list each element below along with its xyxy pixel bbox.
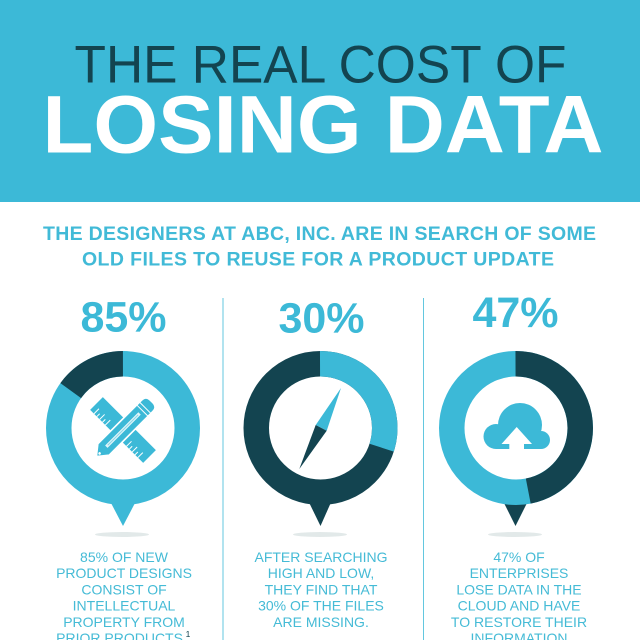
description: TO RESTORE THEIR xyxy=(451,614,587,630)
donut chart: 30% xyxy=(256,364,385,537)
donut chart: 85% xyxy=(33,338,213,537)
description: ENTERPRISES xyxy=(470,565,568,581)
column 1: 85% xyxy=(33,294,213,640)
statistic: 30%: 30% xyxy=(278,294,365,342)
header band xyxy=(0,0,640,202)
title line 2: LOSING DATA xyxy=(42,80,604,170)
subheading xyxy=(43,223,596,270)
description: CONSIST OF xyxy=(81,581,167,597)
description: INTELLECTUAL xyxy=(73,598,176,614)
description xyxy=(56,549,192,640)
description: 1 xyxy=(186,629,191,639)
description: HIGH AND LOW, xyxy=(268,565,374,581)
description: 30% OF THE FILES xyxy=(258,598,384,614)
icon: pencil and ruler xyxy=(90,396,157,463)
title line 1: THE REAL COST OF xyxy=(74,36,566,94)
description: PROPERTY FROM xyxy=(63,614,185,630)
donut chart: 47% xyxy=(452,364,580,537)
description: ARE MISSING. xyxy=(273,614,369,630)
column 2: 30% xyxy=(254,294,388,630)
statistic: 47%: 47% xyxy=(472,289,559,337)
description xyxy=(254,549,388,630)
description: 85% OF NEW xyxy=(80,549,169,565)
description: AFTER SEARCHING xyxy=(254,549,388,565)
statistic: 85%: 85% xyxy=(80,294,167,342)
description xyxy=(451,549,587,640)
subheading: OLD FILES TO REUSE FOR A PRODUCT UPDATE xyxy=(82,248,554,270)
icon: compass needle xyxy=(299,388,341,469)
description: THEY FIND THAT xyxy=(265,581,378,597)
description: PRODUCT DESIGNS xyxy=(56,565,192,581)
column 3: 47% xyxy=(451,289,587,640)
description: 47% OF xyxy=(493,549,545,565)
description: CLOUD AND HAVE xyxy=(458,598,580,614)
description: LOSE DATA IN THE xyxy=(456,581,582,597)
subheading: THE DESIGNERS AT ABC, INC. ARE IN SEARCH OF SOME xyxy=(43,223,596,245)
icon: cloud with upload arrow xyxy=(484,403,550,450)
